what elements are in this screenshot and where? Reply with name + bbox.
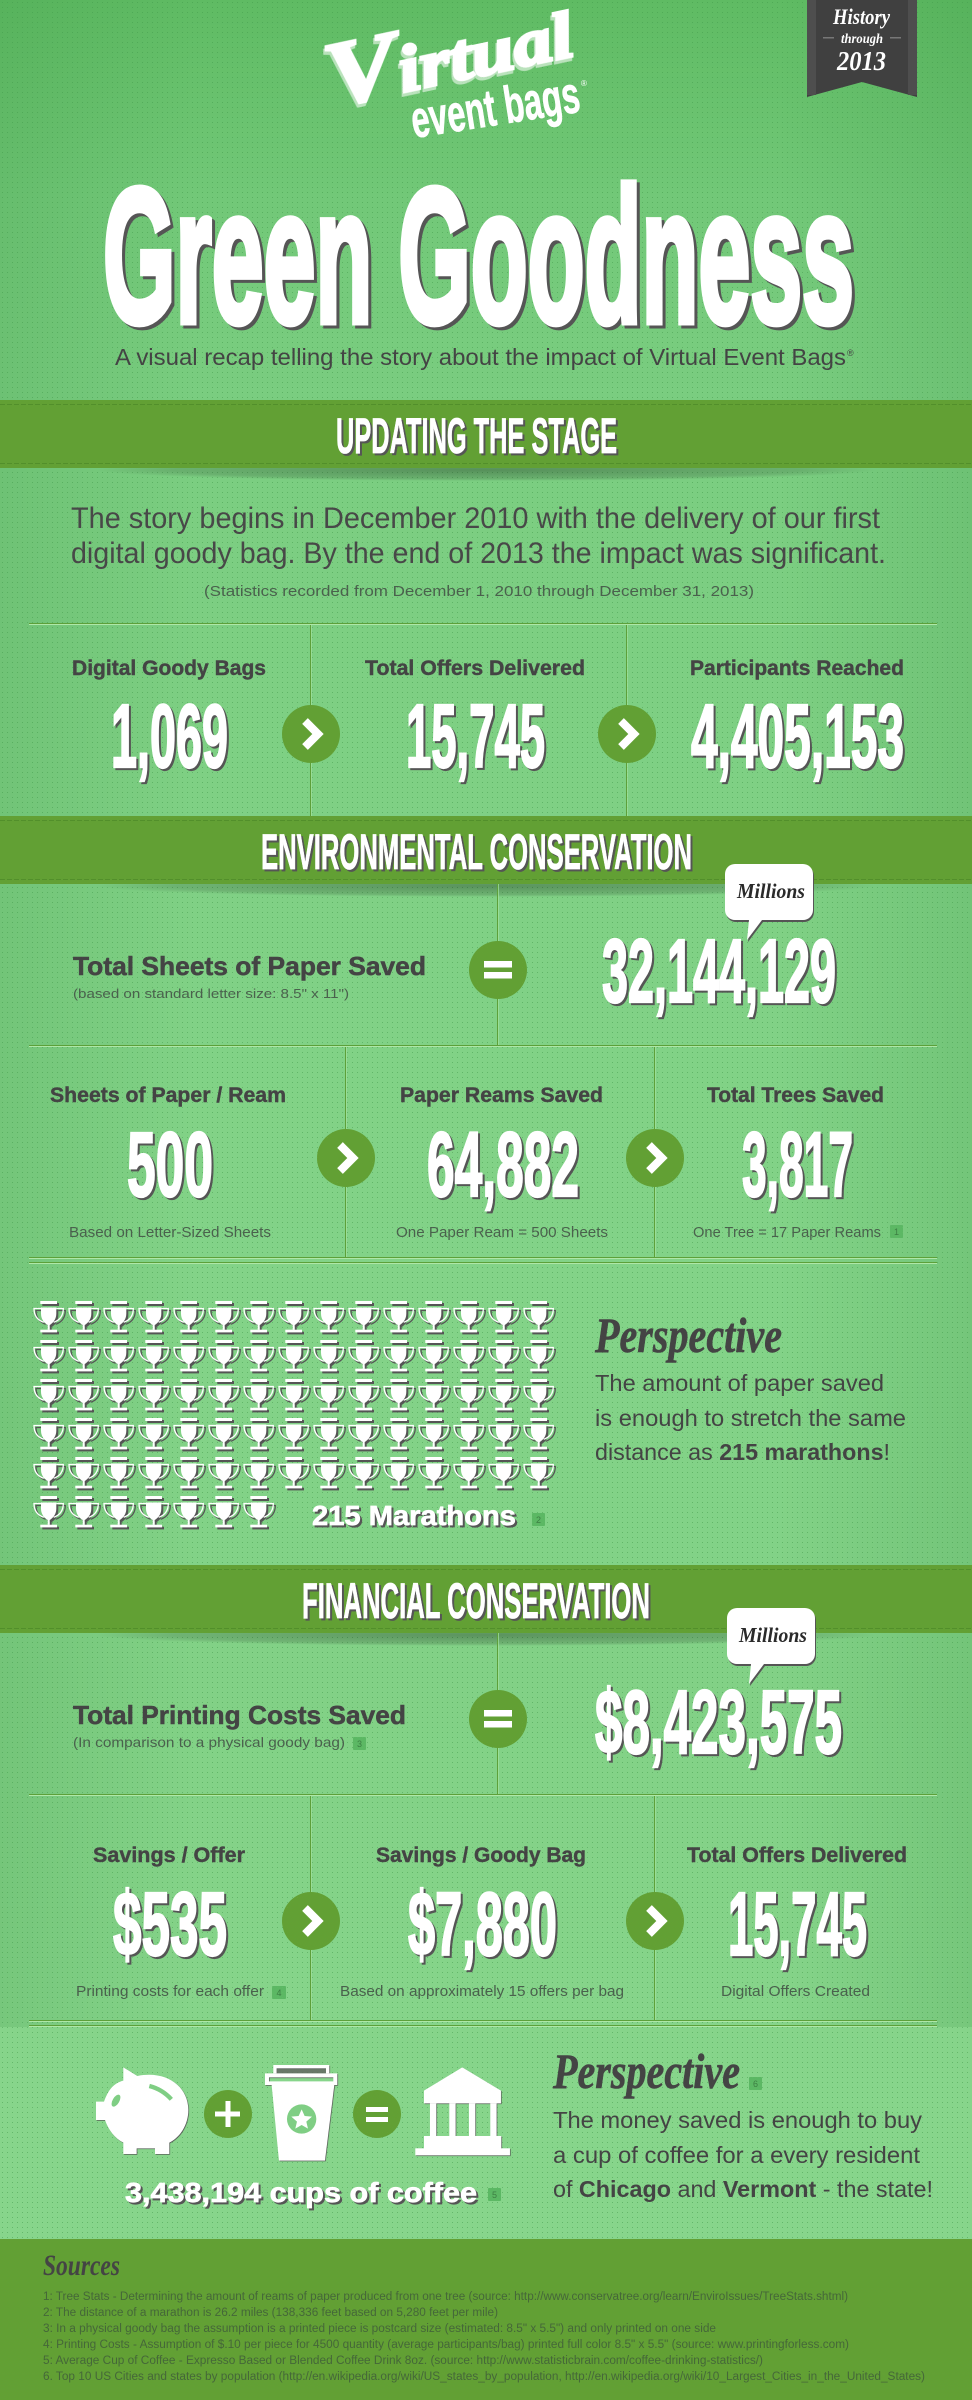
icon: equals (353, 2090, 401, 2138)
footer: sources (0, 2239, 972, 2400)
source list: 4: Printing Costs - Assumption of $.10 per piece for 4500 quantity (average participants/bag) printed full color 8.5" x 5.5" (source: www.printingforless.com) (43, 2339, 849, 2351)
ribbon: history through 2013 (807, 0, 917, 97)
registered mark: ® (581, 79, 587, 88)
perspective: coffee: 6 (753, 2079, 758, 2089)
section band: financial conservation (0, 1565, 972, 1646)
perspective: marathons (594, 1307, 906, 1465)
source list: 2: The distance of a marathon is 26.2 miles (138,336 feet based on 5,280 feet per mile) (43, 2307, 498, 2319)
source list: 1: Tree Stats - Determining the amount of reams of paper produced from one tree (source: http://www.conservatree.org/learn/EnviroIssues/TreeStats.shtml) (43, 2291, 848, 2303)
stat: participants reached (690, 657, 904, 787)
section band: environmental conservation (0, 816, 972, 897)
icon: plus (204, 2090, 252, 2138)
label: total printing costs saved (73, 1700, 406, 1750)
stat: trees saved: 1 (894, 1227, 899, 1237)
stat: trees saved: One Tree = 17 Paper Reams (693, 1224, 881, 1241)
stats row: updating the stage (72, 657, 904, 787)
stat: trees saved (693, 1084, 903, 1241)
label: cups of coffee: 3,438,194 cups of coffee (125, 2177, 477, 2208)
stat: savings per goody bag: $7,880 (408, 1875, 557, 1975)
label: total printing costs saved: (In comparison to a physical goody bag) (73, 1734, 345, 1750)
stat: reams saved: 64,882 (427, 1114, 579, 1216)
perspective: marathons: Perspective (594, 1307, 782, 1363)
perspective: coffee: of Chicago and Vermont - the state! (553, 2176, 933, 2202)
stat: sheets per ream (50, 1084, 286, 1241)
icon: piggy bank (96, 2067, 188, 2154)
logo wordmark: event bags: event bags (407, 66, 584, 150)
stat: sheets per ream: 500 (127, 1114, 213, 1216)
callout: millions (725, 864, 813, 940)
label: total sheets of paper saved: (based on standard letter size: 8.5" x 11") (73, 986, 349, 1001)
stat: reams saved (396, 1084, 608, 1241)
subtitle: ® (847, 348, 854, 358)
stat: reams saved: Paper Reams Saved (400, 1084, 603, 1107)
stat: savings per goody bag: Savings / Goody Bag (376, 1844, 586, 1867)
stat: trees saved: Total Trees Saved (707, 1084, 884, 1107)
ribbon: history through 2013: History (832, 4, 890, 29)
source list: 5: Average Cup of Coffee - Expresso Based or Blended Coffee Drink 8oz. (source: http://www.statisticbrain.com/coffee-drinking-statistics/) (43, 2355, 763, 2367)
section band: updating the stage (0, 400, 972, 481)
label: total printing costs saved: Total Printing Costs Saved (73, 1700, 406, 1730)
stat: total offers delivered: Digital Offers Created (721, 1983, 870, 2000)
equals icon (469, 941, 527, 999)
stat: trees saved: 3,817 (742, 1114, 853, 1216)
stat: savings per offer: $535 (113, 1875, 227, 1975)
stat: savings per offer: Printing costs for each offer (76, 1983, 264, 2000)
callout: millions: Millions (738, 1623, 807, 1647)
total sheets row (73, 864, 836, 1022)
source list (43, 2291, 925, 2383)
arrow (282, 705, 340, 763)
logo (315, 0, 587, 150)
ribbon: history through 2013: 2013 (836, 46, 886, 76)
arrow (626, 1129, 684, 1187)
stat: savings per offer: Savings / Offer (93, 1844, 245, 1867)
perspective: coffee: The money saved is enough to buy (553, 2107, 923, 2133)
stat: total offers delivered: 15,745 (406, 687, 545, 787)
arrow (626, 1892, 684, 1950)
callout: millions: Millions (736, 879, 805, 903)
perspective: marathons: distance as 215 marathons! (595, 1439, 890, 1465)
stat: reams saved: One Paper Ream = 500 Sheets (396, 1224, 608, 1241)
total printing costs row (73, 1608, 842, 1773)
label: 215 marathons: 215 Marathons (312, 1500, 516, 1531)
stat: total offers delivered (365, 657, 585, 787)
section band: updating the stage: UPDATING THE STAGE (336, 408, 617, 464)
stat: total offers delivered (687, 1844, 907, 2000)
intro text: The story begins in December 2010 with the delivery of our first (71, 502, 881, 535)
ribbon: history through 2013: through (841, 32, 883, 47)
subtitle: A visual recap telling the story about the impact of Virtual Event Bags (115, 344, 846, 370)
label: 215 marathons: 2 (536, 1515, 541, 1525)
callout: millions (727, 1608, 815, 1684)
stat: savings per offer: 4 (276, 1988, 282, 1998)
section band: financial conservation: FINANCIAL CONSERVATION (302, 1573, 650, 1629)
stat: savings per offer (76, 1844, 286, 2000)
stat: sheets per ream: Sheets of Paper / Ream (50, 1084, 286, 1107)
stats row: financial (76, 1844, 907, 2000)
stat: total offers delivered: Total Offers Delivered (687, 1844, 907, 1867)
stat: digital goody bags: 1,069 (111, 687, 228, 787)
arrow (317, 1129, 375, 1187)
icon: coffee cup (265, 2065, 337, 2161)
stat: digital goody bags (72, 657, 266, 787)
label: total printing costs saved: 3 (357, 1739, 362, 1749)
stat: savings per goody bag: Based on approximately 15 offers per bag (340, 1983, 624, 2000)
intro text: (Statistics recorded from December 1, 2010 through December 31, 2013) (204, 583, 754, 600)
stat: savings per goody bag (340, 1844, 624, 2000)
pictogram: 215 marathons trophies (34, 1301, 553, 1527)
heading: sources: Sources (43, 2249, 120, 2282)
intro text: digital goody bag. By the end of 2013 the impact was significant. (71, 537, 886, 570)
stat: digital goody bags: Digital Goody Bags (72, 657, 266, 680)
label: total sheets of paper saved (73, 951, 426, 1001)
stat: total offers delivered: Total Offers Delivered (365, 657, 585, 680)
equals icon (469, 1690, 527, 1748)
stat: sheets per ream: Based on Letter-Sized Sheets (69, 1224, 271, 1241)
perspective: coffee (552, 2043, 933, 2202)
icon: bank (415, 2067, 510, 2155)
icon equation: piggy plus coffee equals bank (96, 2065, 510, 2161)
label: total sheets of paper saved: Total Sheets of Paper Saved (73, 951, 426, 981)
arrow (598, 705, 656, 763)
stats row: environmental (50, 1084, 903, 1241)
source list: 6. Top 10 US Cities and states by population (http://en.wikipedia.org/wiki/US_states_by_population, http://en.wikipedia.org/wiki/10_Largest_Cities_in_the_United_States) (43, 2371, 925, 2383)
perspective: marathons: The amount of paper saved (595, 1370, 884, 1396)
stat: participants reached: Participants Reached (690, 657, 904, 680)
perspective: marathons: is enough to stretch the same (595, 1405, 906, 1431)
label: cups of coffee: 5 (492, 2190, 497, 2200)
source list: 3: In a physical goody bag the assumption is a printed piece is postcard size (estimated: 8.5" x 5.5") and only printed on one side (43, 2323, 716, 2335)
intro text (71, 502, 886, 600)
arrow (282, 1892, 340, 1950)
logo wordmark: Virtual: Virtual (315, 0, 581, 127)
perspective: coffee: a cup of coffee for a every resident (553, 2142, 921, 2168)
perspective: coffee: Perspective (552, 2043, 740, 2099)
